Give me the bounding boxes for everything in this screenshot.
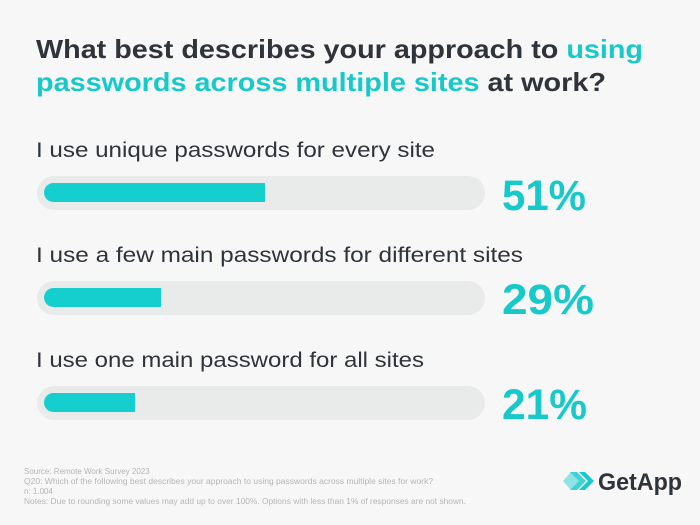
item: unique passwords: I use unique passwords for every site — [36, 139, 435, 162]
footer notes: Notes: Due to rounding some values may add up to over 100%. Options with less than 1% of responses are not shown. — [24, 497, 466, 506]
footer notes: n: 1.004 — [24, 487, 53, 496]
item: one main password — [36, 349, 587, 429]
logo: GetApp: GetApp — [598, 469, 682, 496]
footer notes: Source: Remote Work Survey 2023 — [24, 467, 150, 476]
footer notes: Q20: Which of the following best describes your approach to using passwords across multiple sites for work? — [24, 477, 434, 486]
item: one main password: 21% — [502, 381, 587, 429]
logo: GetApp — [563, 469, 682, 496]
item: one main password: I use one main password for all sites — [36, 349, 424, 372]
title: passwords across multiple sites at work? — [36, 67, 606, 97]
item: few main passwords: 29% — [502, 276, 594, 324]
title — [36, 34, 643, 97]
item: few main passwords: I use a few main passwords for different sites — [36, 244, 523, 267]
footer notes — [24, 467, 466, 506]
item: unique passwords: 51% — [502, 172, 586, 220]
item: few main passwords — [36, 244, 594, 324]
item: unique passwords — [36, 139, 586, 220]
title: What best describes your approach to using — [36, 34, 643, 64]
